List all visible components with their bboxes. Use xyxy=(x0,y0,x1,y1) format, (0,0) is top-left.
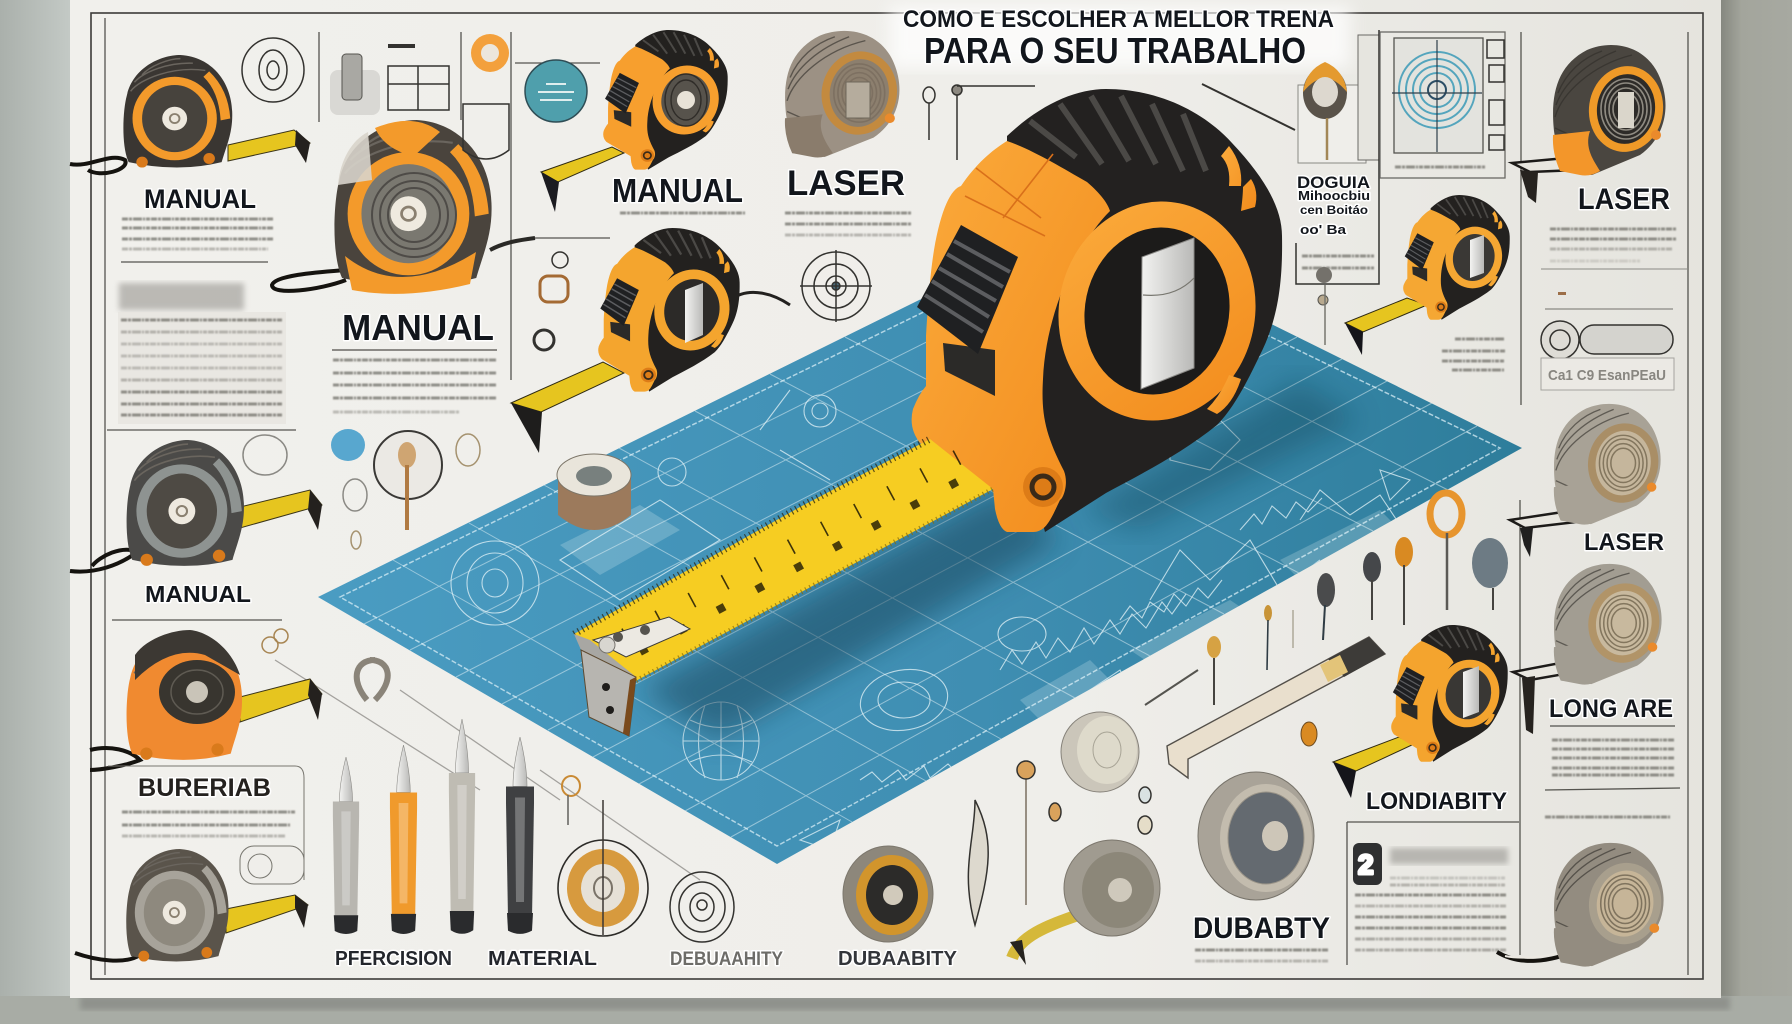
panel: reference card with ring xyxy=(1296,30,1379,345)
icon: teal seal xyxy=(525,60,587,122)
description large xyxy=(333,360,496,412)
tape measure D xyxy=(511,228,790,453)
label: laser: LASER xyxy=(787,164,905,203)
pin xyxy=(1316,267,1332,345)
tape measure N xyxy=(75,849,308,962)
pins row xyxy=(1145,493,1508,746)
pens xyxy=(333,719,534,934)
durability label: DEBUAAHITY xyxy=(670,949,783,970)
tape measure O xyxy=(1198,772,1314,900)
panel: manual large xyxy=(272,120,535,412)
pen 3 xyxy=(449,719,475,934)
top icon row xyxy=(242,34,745,213)
blueprint sheet xyxy=(318,298,1522,864)
label: bureriab: BURERIAB xyxy=(138,774,271,802)
card text: oo' Ba xyxy=(1300,222,1347,237)
title xyxy=(890,6,1350,71)
hanging tool xyxy=(968,800,988,925)
card text: Mihoocbiu xyxy=(1298,188,1370,203)
note scribble xyxy=(1442,339,1505,370)
description laser xyxy=(785,213,912,235)
icon: measuring bar xyxy=(1541,321,1673,359)
label: manual large: MANUAL xyxy=(342,307,494,348)
label: manual lower: MANUAL xyxy=(145,581,251,607)
badge 2 xyxy=(1353,843,1382,885)
tape measure R xyxy=(843,846,933,942)
panel: laser top-right xyxy=(1512,45,1688,390)
card text: cen Boitáo xyxy=(1300,203,1368,217)
description xyxy=(122,219,273,249)
card text: DOGUIA xyxy=(1297,173,1370,192)
icon: sketches xyxy=(243,434,480,549)
tape measure I xyxy=(1513,564,1665,734)
description xyxy=(1552,740,1675,775)
pen 1 xyxy=(333,757,359,934)
ring pin xyxy=(562,776,580,825)
tape hook xyxy=(574,617,690,736)
icon: orange ring xyxy=(471,34,509,72)
tape measure H xyxy=(1510,404,1664,557)
tape measure J xyxy=(1333,625,1508,798)
tape measure A xyxy=(70,55,310,173)
small icons column xyxy=(534,252,568,350)
label: long are: LONG ARE xyxy=(1549,695,1673,723)
blueprint grid xyxy=(364,247,1477,837)
badge 2: 2 xyxy=(1358,849,1374,880)
tape measure C xyxy=(541,30,728,212)
icon: blue drop xyxy=(331,429,365,461)
panel: target diagram xyxy=(1380,32,1505,178)
label: manual upper: MANUAL xyxy=(612,172,743,209)
description strip xyxy=(620,212,745,214)
icons mid-left xyxy=(243,429,631,549)
title: PARA O SEU TRABALHO xyxy=(924,30,1306,71)
main tape measure xyxy=(912,89,1282,532)
dial concentric xyxy=(670,872,734,942)
blueprint sketches xyxy=(451,390,1410,850)
tape measure K xyxy=(1497,843,1667,967)
tape measure L xyxy=(70,440,322,572)
icon: small rings xyxy=(262,629,288,653)
icon: ring diagram xyxy=(1298,62,1366,163)
main tape blade xyxy=(574,439,993,736)
tape measure M xyxy=(90,630,322,770)
description xyxy=(1550,229,1676,261)
pen 4 xyxy=(506,737,534,934)
ruler xyxy=(1167,637,1385,778)
title: COMO E ESCOLHER A MELLOR TRENA xyxy=(903,6,1334,33)
panel: manual top-left xyxy=(70,55,310,249)
card text xyxy=(1297,173,1370,237)
description xyxy=(1195,950,1328,961)
icon: dial sketch xyxy=(242,38,304,102)
icon: dial with spoon xyxy=(374,431,442,530)
text block left xyxy=(118,283,286,424)
pins near laser xyxy=(923,84,1295,160)
icon: target xyxy=(800,250,872,322)
precision label: PFERCISION xyxy=(335,948,452,970)
caption box xyxy=(1541,358,1674,390)
small marks bottom xyxy=(1017,761,1152,905)
tape measure P xyxy=(1010,840,1160,965)
spool on blueprint xyxy=(557,454,631,530)
label: dubabty: DUBABTY xyxy=(1193,912,1330,945)
belt clip xyxy=(1141,238,1194,389)
icon: clip xyxy=(330,54,380,115)
pen 2 xyxy=(390,745,417,934)
panel: bureriab text xyxy=(108,766,304,884)
tape measure G xyxy=(1345,195,1510,355)
panel: numbered block xyxy=(1353,843,1508,950)
label: laser lower: LASER xyxy=(1584,529,1664,556)
caption box: Ca1 C9 EsanPEaU xyxy=(1548,367,1666,384)
icon: table xyxy=(388,46,449,110)
durability label 2: DUBAABITY xyxy=(838,948,958,970)
icon: cup sketch xyxy=(463,104,509,159)
dial orange xyxy=(558,800,648,936)
label: londiabity: LONDIABITY xyxy=(1366,788,1507,815)
label: laser right: LASER xyxy=(1578,183,1670,216)
disc Q xyxy=(1061,712,1139,792)
material label: MATERIAL xyxy=(488,948,597,970)
tape measure B xyxy=(272,120,535,294)
icon: pliers xyxy=(357,660,388,700)
tape measure E xyxy=(785,31,903,158)
label: manual: MANUAL xyxy=(144,184,256,214)
tape measure F xyxy=(1512,45,1669,203)
